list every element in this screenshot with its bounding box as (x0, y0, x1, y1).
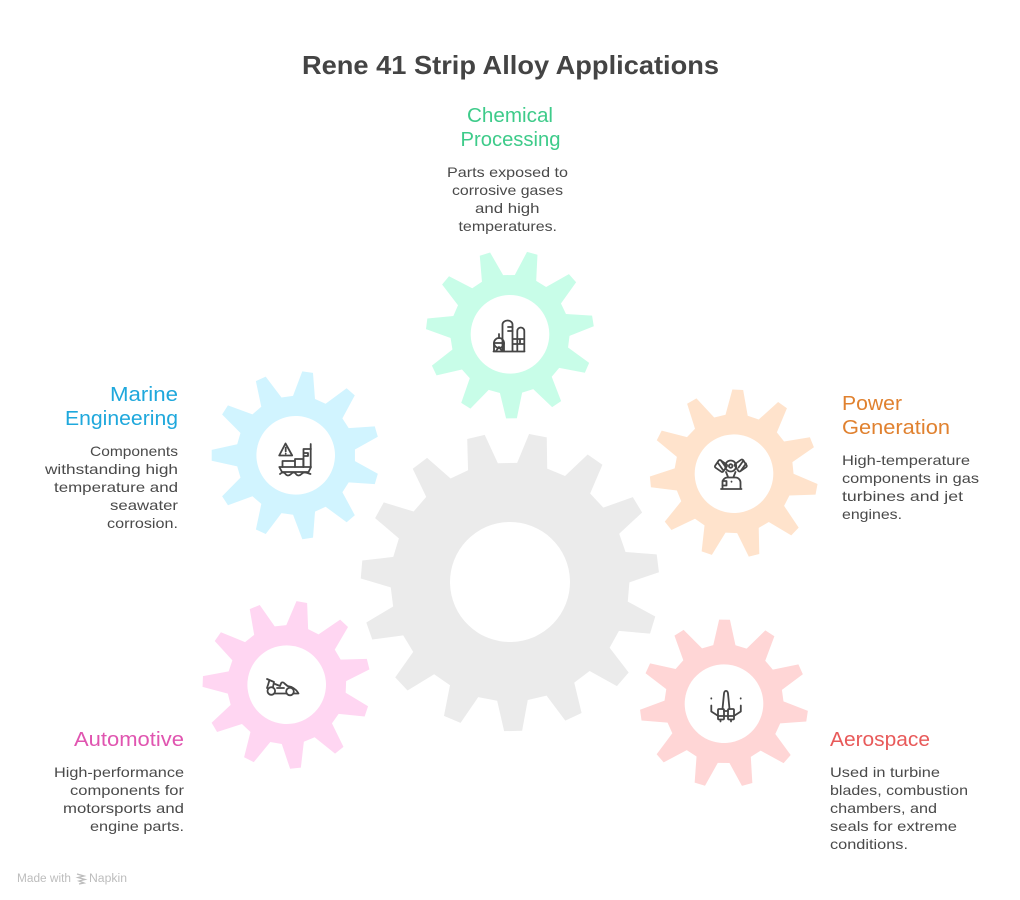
panel: power generation (633, 374, 979, 575)
text: marine engineering description (44, 443, 178, 531)
heading: chemical processing (460, 105, 560, 151)
heading: marine engineering: Marine (110, 384, 178, 406)
text: aerospace description: conditions. (830, 836, 908, 852)
footer: made with napkin: Made with (17, 873, 71, 885)
text: aerospace description: Used in turbine (830, 764, 940, 780)
text: chemical processing description (447, 164, 568, 234)
text: chemical processing description: temperatures. (458, 218, 557, 234)
title: Rene 41 Strip Alloy Applications (302, 50, 719, 80)
icon: ship with warning (279, 444, 311, 476)
icon: race car (267, 679, 298, 695)
gear: aerospace (621, 602, 828, 808)
gear: marine engineering (201, 362, 391, 550)
icon: refinery (494, 320, 524, 352)
heading: power generation: Power (842, 393, 902, 415)
heading: aerospace: Aerospace (830, 729, 930, 751)
text: automotive description: motorsports and (63, 800, 184, 816)
text: automotive description: engine parts. (90, 818, 184, 834)
heading: power generation (842, 393, 950, 439)
text: chemical processing description: and high (475, 200, 540, 216)
text: aerospace description (830, 764, 968, 852)
text: power generation description: High-temperature (842, 452, 970, 468)
text: marine engineering description: seawater (110, 497, 178, 513)
text: aerospace description: blades, combustion (830, 782, 968, 798)
panel: aerospace (621, 602, 968, 852)
footer: made with napkin (17, 873, 127, 885)
text: marine engineering description: temperature and (54, 479, 178, 495)
text: power generation description: components in gas (842, 470, 979, 486)
panel: marine engineering (44, 362, 391, 550)
heading: marine engineering (65, 384, 178, 430)
text: power generation description (842, 452, 979, 522)
text: chemical processing description: Parts exposed to (447, 164, 568, 180)
text: marine engineering description: corrosion. (107, 515, 178, 531)
text: chemical processing description: corrosive gases (452, 182, 563, 198)
text: marine engineering description: Components (90, 443, 178, 459)
icon: engine (714, 459, 747, 489)
text: aerospace description: seals for extreme (830, 818, 957, 834)
heading: chemical processing: Chemical (467, 105, 553, 127)
heading: marine engineering: Engineering (65, 408, 178, 430)
text: automotive description: components for (70, 782, 184, 798)
text: aerospace description: chambers, and (830, 800, 937, 816)
text: automotive description (54, 764, 184, 834)
footer: made with napkin: Napkin (89, 873, 127, 885)
text: marine engineering description: withstanding high (44, 461, 178, 477)
panel: automotive (54, 594, 379, 834)
gear: power generation (633, 374, 836, 575)
heading: automotive: Automotive (74, 729, 184, 751)
text: power generation description: turbines and jet (842, 488, 963, 504)
central grey gear (358, 431, 662, 734)
text: power generation description: engines. (842, 506, 902, 522)
panel: chemical processing (425, 105, 595, 420)
gear: chemical processing (425, 251, 595, 420)
gear: automotive (195, 594, 379, 777)
icon: spacecraft (711, 691, 741, 722)
text: automotive description: High-performance (54, 764, 184, 780)
heading: power generation: Generation (842, 417, 950, 439)
heading: chemical processing: Processing (460, 129, 560, 151)
